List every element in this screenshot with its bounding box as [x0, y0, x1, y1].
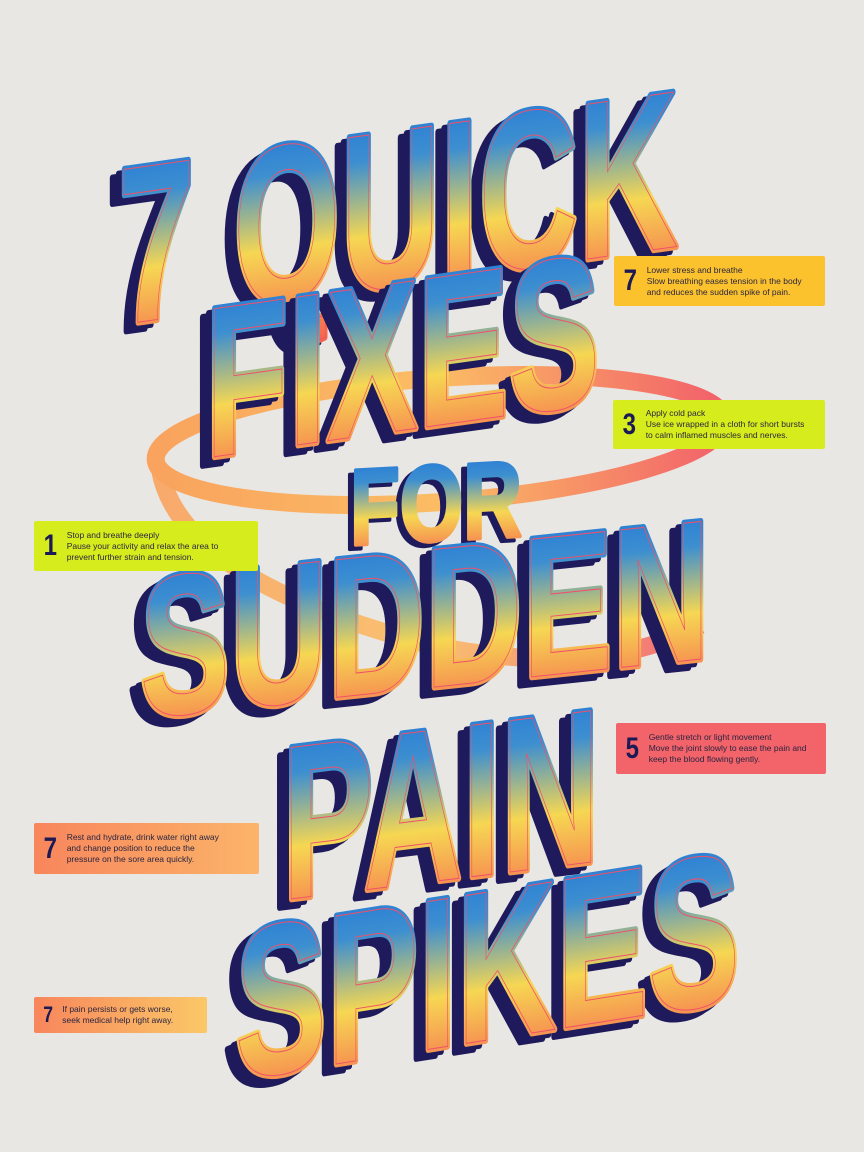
callout: 5: 5 [626, 732, 639, 764]
callout: 7 lower left: pressure on the sore area quickly. [67, 854, 194, 864]
title line: PAIN: PAIN [282, 662, 600, 947]
callout: 5: keep the blood flowing gently. [649, 754, 760, 764]
callout: 1: prevent further strain and tension. [67, 552, 194, 562]
title line: FOR: FOR [344, 442, 516, 572]
callout: 7 top right: Lower stress and breathe [647, 264, 743, 274]
callout: 7 lower left [34, 823, 259, 874]
callout: 7 lower left: 7 [44, 832, 57, 864]
callout: 7 top right: 7 [624, 264, 637, 297]
callout: 3: Apply cold pack [646, 408, 705, 418]
callout: 7 top right [614, 256, 825, 306]
callout: 1: Stop and breathe deeply [67, 530, 159, 540]
callout: 7 bottom left: 7 [43, 1002, 53, 1027]
callout: 3 [613, 400, 825, 449]
title line: PAIN [270, 662, 600, 955]
title line: PAIN: PAIN [270, 670, 588, 955]
title line: PAIN: PAIN [282, 662, 600, 947]
callout: 3: Use ice wrapped in a cloth for short bursts [646, 419, 804, 429]
callout: 7 top right: Slow breathing eases tension in the body [647, 276, 802, 286]
callout: 3: to calm inflamed muscles and nerves. [646, 430, 788, 440]
title line: FIXES: FIXES [193, 216, 588, 512]
callout: 7 lower left: and change position to reduce the [67, 843, 195, 853]
callout: 7 lower left: Rest and hydrate, drink water right away [67, 832, 219, 842]
callout: 3: 3 [623, 408, 636, 440]
ribbon [151, 358, 729, 659]
callout: 5: Move the joint slowly to ease the pain and [649, 743, 807, 753]
callout: 1: 1 [44, 529, 57, 562]
title line: 7 QUICK [106, 42, 678, 381]
callout: 7 bottom left [34, 997, 207, 1033]
callout: 5: Gentle stretch or light movement [649, 732, 772, 742]
callout: 5 [616, 723, 826, 774]
callout: 7 top right: and reduces the sudden spike of pain. [647, 286, 790, 296]
title line: PAIN: PAIN [276, 666, 594, 952]
callout: 7 bottom left: If pain persists or gets worse, [62, 1004, 173, 1014]
title line: FIXES: FIXES [205, 207, 600, 504]
title line: FIXES: FIXES [205, 207, 600, 504]
title line: FOR: FOR [350, 438, 522, 568]
title line: FIXES: FIXES [199, 212, 594, 509]
title line: FIXES [193, 207, 600, 512]
callout: 7 bottom left: seek medical help right away. [62, 1015, 173, 1025]
callout: 1: Pause your activity and relax the area to [67, 540, 218, 550]
callout: 1 [34, 521, 258, 571]
